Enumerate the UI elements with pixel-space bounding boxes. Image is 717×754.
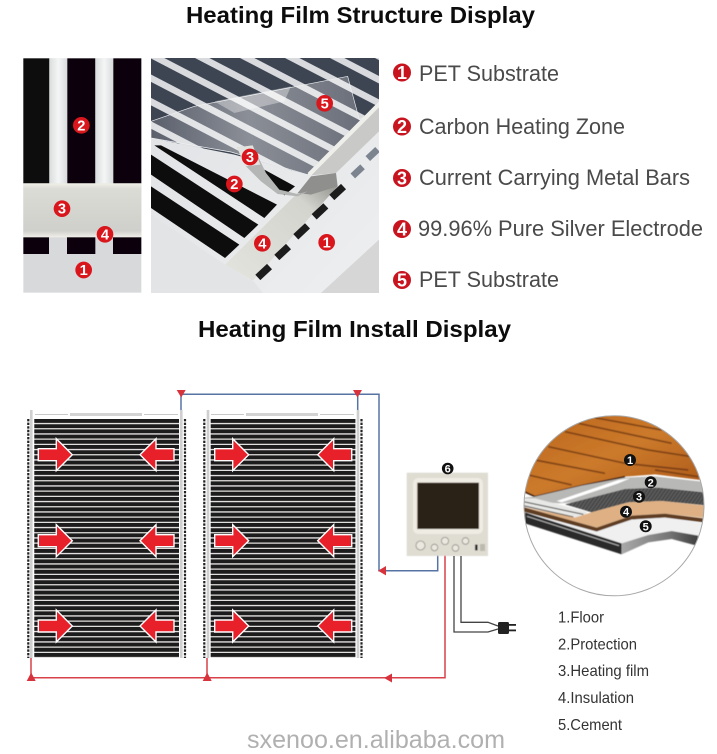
cross-section number badges <box>620 454 657 533</box>
legend: floor layers: 3.Heating film <box>558 663 649 680</box>
photo: flat film close-up: 3 <box>58 202 66 218</box>
cross-section number badges: 4 <box>623 507 630 519</box>
legend: floor layers: 5.Cement <box>558 717 623 734</box>
photo: flat film close-up: 1 <box>80 263 88 279</box>
heating film panel 1 <box>28 410 185 658</box>
floor wood layer <box>526 416 700 498</box>
legend item 4: 99.96% Pure Silver Electrode <box>418 216 703 241</box>
floor cross-section circle <box>522 408 708 596</box>
legend: structure parts <box>393 61 703 292</box>
red heat arrows <box>38 439 352 642</box>
badge: controller number 6 <box>442 463 454 476</box>
silver bus strip <box>522 498 587 518</box>
insulation layer <box>522 501 708 528</box>
legend item 5: PET Substrate <box>419 267 559 292</box>
cross-section number badges: 3 <box>636 492 642 504</box>
photo: flat film close-up: 2 <box>77 118 85 134</box>
legend item 5: 5 <box>397 270 407 290</box>
cement front edge <box>525 512 622 554</box>
legend item 4: 4 <box>397 220 407 240</box>
protection layer <box>522 476 708 503</box>
legend: floor layers <box>558 610 649 734</box>
thermostat controller <box>407 473 488 556</box>
cross-section number badges: 2 <box>648 477 654 489</box>
carbon heating layer <box>565 488 708 512</box>
title: install display: Heating Film Install Display <box>198 316 511 342</box>
heating film panel 2 <box>204 410 362 658</box>
power cord and plug <box>454 556 516 634</box>
legend item 2: Carbon Heating Zone <box>419 114 625 139</box>
photo: peeled film layers: 1 <box>323 235 331 251</box>
photo: peeled film layers: 3 <box>246 150 254 166</box>
title: structure display: Heating Film Structure Display <box>186 2 535 28</box>
wiring: red return line <box>27 555 445 682</box>
legend item 3: Current Carrying Metal Bars <box>419 165 690 190</box>
photo: flat film close-up: 4 <box>101 227 110 243</box>
photo: peeled film layers: 5 <box>321 96 329 112</box>
photo: peeled film layers <box>151 58 379 293</box>
photo: flat film close-up <box>23 58 141 293</box>
legend: floor layers: 1.Floor <box>558 610 605 627</box>
legend: floor layers: 4.Insulation <box>558 690 634 707</box>
wiring: blue supply line <box>177 390 438 575</box>
legend: floor layers: 2.Protection <box>558 636 637 653</box>
cross-section number badges: 1 <box>627 455 633 467</box>
legend item 3: 3 <box>397 168 407 188</box>
watermark: sxenoo.en.alibaba.com <box>247 726 505 754</box>
cross-section number badges: 5 <box>643 521 649 533</box>
photo: peeled film layers: 4 <box>258 236 267 252</box>
legend item 1: PET Substrate <box>419 61 559 86</box>
legend item 1: 1 <box>397 63 407 83</box>
legend item 2: 2 <box>397 117 407 137</box>
photo: peeled film layers: 2 <box>230 177 238 193</box>
badge: controller number 6: 6 <box>445 464 451 476</box>
cement layer <box>525 512 705 543</box>
